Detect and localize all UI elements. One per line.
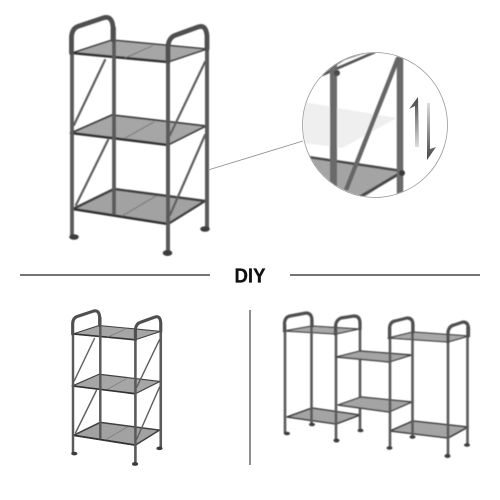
- left unit: [284, 313, 364, 442]
- main three-tier shelf rack: [69, 17, 210, 256]
- icon: up and down adjustment arrows: [409, 97, 436, 160]
- detail circle: adjustable shelf: [302, 50, 448, 200]
- divider line left: [20, 274, 210, 276]
- leader line to detail: [208, 141, 303, 170]
- separated rack configuration: [284, 313, 470, 458]
- small three-tier rack configuration: [71, 311, 163, 466]
- heading: DIY: DIY: [234, 266, 266, 288]
- right unit: [386, 318, 470, 458]
- divider line right: [290, 274, 480, 276]
- vertical divider: [249, 310, 251, 465]
- middle shelves: [336, 351, 412, 412]
